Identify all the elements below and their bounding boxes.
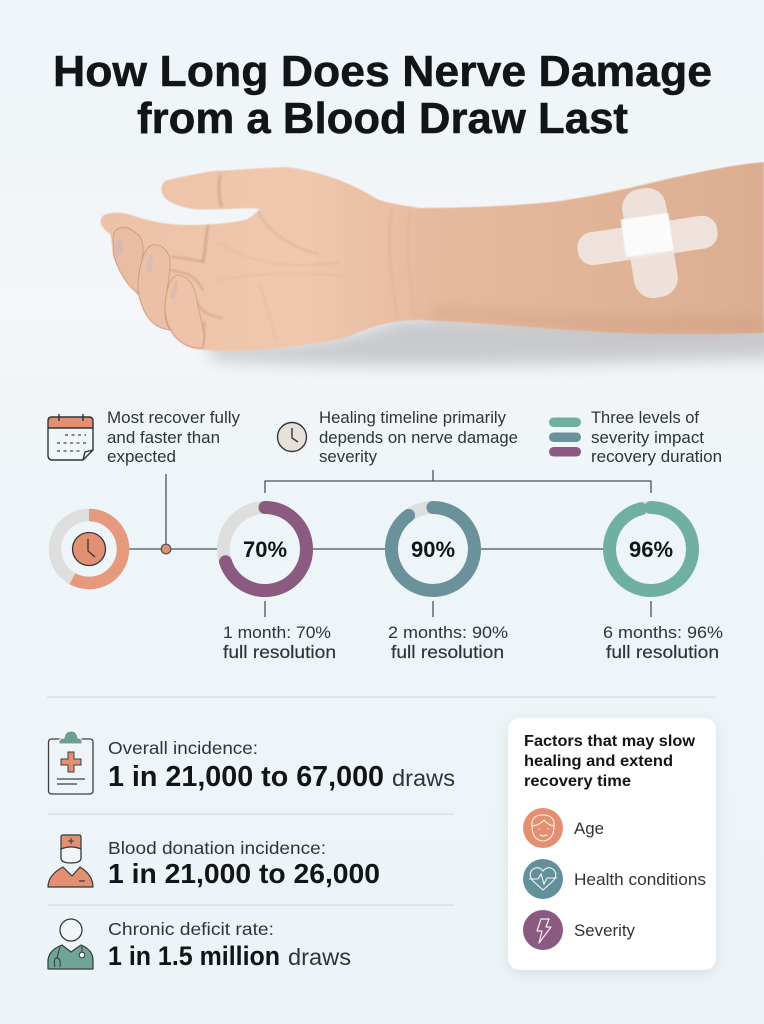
- text: three levels: recovery duration: [591, 448, 722, 466]
- icon: health: [523, 859, 563, 899]
- timeline dot: [161, 544, 171, 554]
- stat: chronic deficit: 1 in 1.5 million: [108, 941, 280, 971]
- donut: 70%: [224, 508, 306, 590]
- label: 6 months: [603, 624, 723, 662]
- legend: severity pills: [549, 418, 581, 456]
- donut: 70%: 70%: [243, 537, 287, 562]
- stat: overall incidence: 1 in 21,000 to 67,000: [108, 761, 384, 793]
- title: [53, 47, 712, 143]
- stat: blood donation: 1 in 21,000 to 26,000: [108, 858, 380, 889]
- label: 6 months: 6 months: 96%: [603, 624, 723, 642]
- stat: blood donation: Blood donation incidence:: [108, 838, 326, 858]
- icon: doctor: [48, 919, 93, 969]
- forearm shading: [430, 308, 764, 332]
- label: 1 month: full resolution: [223, 642, 336, 662]
- label: 2 months: 2 months: 90%: [388, 624, 508, 642]
- stat: chronic deficit: [108, 919, 351, 971]
- stat: chronic deficit: draws: [288, 944, 351, 970]
- text: healing timeline: severity: [319, 448, 378, 466]
- icon: clipboard: [48, 731, 93, 794]
- illustration: arm with bandage: [101, 162, 764, 366]
- icon: calendar: [48, 414, 93, 460]
- donut: start clock: [55, 515, 123, 583]
- label: age: Age: [574, 820, 604, 838]
- factors heading: Factors that may slow: [524, 733, 696, 750]
- text: healing timeline: depends on nerve damage: [319, 429, 518, 447]
- factors heading: [524, 733, 696, 790]
- text: most recover: [107, 409, 241, 466]
- donut: 90%: 90%: [411, 537, 455, 562]
- label: 1 month: 1 month: 70%: [223, 624, 331, 642]
- text: most recover: expected: [107, 448, 176, 466]
- panel: factors: [508, 718, 716, 970]
- donut: 90%: [391, 508, 474, 590]
- text: three levels: [591, 409, 722, 466]
- stat: blood donation: [108, 838, 380, 889]
- stat: chronic deficit: Chronic deficit rate:: [108, 919, 274, 939]
- text: healing timeline: Healing timeline primarily: [319, 409, 507, 427]
- text: healing timeline: [319, 409, 518, 466]
- icon: severity: [523, 910, 563, 950]
- donut: 96%: [610, 508, 693, 590]
- text: three levels: severity impact: [591, 429, 704, 447]
- timeline connectors: [129, 470, 651, 617]
- text: most recover: and faster than: [107, 429, 220, 447]
- factors heading: healing and extend: [524, 753, 673, 770]
- text: most recover: Most recover fully: [107, 409, 241, 427]
- label: severity: Severity: [574, 922, 636, 940]
- donut: 96%: 96%: [629, 537, 673, 562]
- icon: nurse: [48, 835, 93, 887]
- label: 2 months: [388, 624, 508, 662]
- bandage: [575, 185, 720, 301]
- stat: overall incidence: Overall incidence:: [108, 738, 258, 758]
- fingers: [113, 227, 204, 348]
- title: from a Blood Draw Last: [137, 94, 628, 143]
- stat: overall incidence: draws: [392, 765, 455, 791]
- icon: age: [523, 808, 563, 848]
- factors heading: recovery time: [524, 773, 631, 790]
- label: 6 months: full resolution: [606, 642, 719, 662]
- label: 1 month: [223, 624, 336, 662]
- icon: clock: [278, 422, 306, 452]
- stat: overall incidence: [108, 738, 455, 793]
- title: How Long Does Nerve Damage: [53, 47, 712, 96]
- text: three levels: Three levels of: [591, 409, 699, 427]
- hand details: [170, 176, 414, 345]
- label: health conditions: Health conditions: [574, 871, 706, 889]
- label: 2 months: full resolution: [391, 642, 504, 662]
